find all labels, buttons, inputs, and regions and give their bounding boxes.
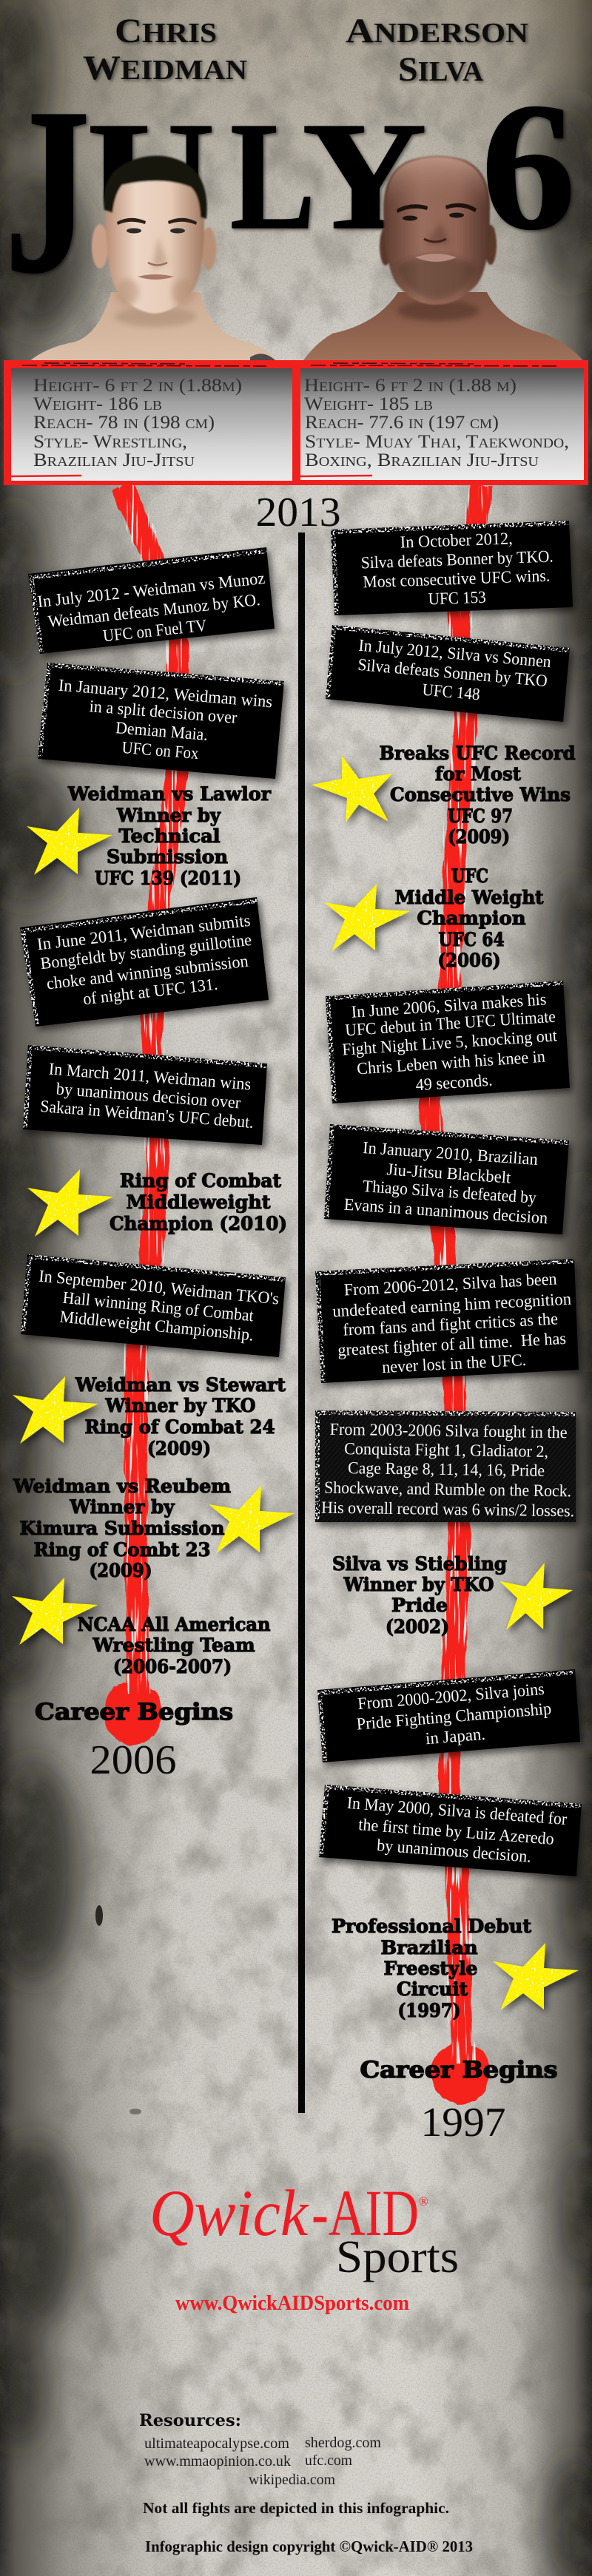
- milestone: Weidman vs Reubem: Winner by: [70, 1496, 175, 1518]
- resources: wikipedia.com: [249, 2472, 335, 2488]
- stats text: Style- Muay Thai, Taekwondo,: [305, 432, 569, 452]
- milestone: Weidman vs Lawlor: UFC 139 (2011): [95, 868, 241, 889]
- milestone: Professional Debut: Brazilian: [380, 1937, 478, 1958]
- card: September 2010 Hall: Middleweight Championship.: [59, 1307, 255, 1345]
- card: June 2006 Leben: UFC debut in The UFC Ultimate: [344, 1007, 556, 1039]
- card: July 2012 Sonnen: [326, 625, 570, 722]
- resources: sherdog.com: [305, 2435, 381, 2451]
- card: March 2011 Sakara: by unanimous decision over: [56, 1079, 241, 1112]
- card: January 2010 Thiago Silva: In January 2010, Brazilian: [362, 1138, 539, 1169]
- milestone: Weidman vs Lawlor: Technical: [118, 825, 221, 847]
- date headline: July 6: U: [87, 91, 215, 262]
- start: Silva career begins: [360, 2057, 558, 2146]
- stats text: Boxing, Brazilian Jiu-Jitsu: [305, 450, 539, 470]
- portrait: Anderson Silva: [302, 155, 585, 362]
- stats text: [304, 376, 569, 470]
- card: July 2012 Munoz: Weidman defeats Munoz by KO.: [47, 590, 261, 631]
- milestone: Weidman vs Reubem: [13, 1475, 295, 1581]
- name: Weidman: WEIDMAN: [83, 49, 247, 87]
- milestone: Professional Debut: Freestyle: [383, 1958, 478, 1979]
- milestone: UFC Middle Weight Champion: [324, 865, 544, 971]
- milestone: Silva vs Stiebling: Pride: [391, 1595, 448, 1616]
- card: June 2011 Bongfeldt: In June 2011, Weidman submits: [36, 911, 252, 953]
- resources: ufc.com: [305, 2452, 352, 2469]
- milestone: Silva vs Stiebling: [332, 1553, 573, 1637]
- stats text: Height- 6 ft 2 in (1.88m): [33, 376, 242, 396]
- logo: Qwick-AID Sports: [149, 2177, 459, 2282]
- milestone: Silva vs Stiebling: (2002): [386, 1616, 449, 1637]
- card: July 2012 Munoz: [28, 547, 275, 654]
- milestone: NCAA All American: [12, 1578, 271, 1677]
- year: 2013: 2013: [256, 490, 340, 535]
- left career dot: [104, 1681, 162, 1745]
- card: October 2012 Bonner: In October 2012,: [400, 529, 513, 552]
- stats text: Height- 6 ft 2 in (1.88 m): [304, 376, 517, 396]
- card: January 2010 Thiago Silva: Jiu-Jitsu Blackbelt: [386, 1160, 512, 1187]
- star: [13, 1376, 98, 1444]
- stats text: Reach- 77.6 in (197 cm): [305, 413, 499, 433]
- milestone: NCAA All American: (2006-2007): [113, 1656, 232, 1677]
- stats text: [33, 376, 242, 470]
- card: June 2006 Leben: [326, 981, 570, 1103]
- milestone: UFC Middle Weight Champion: Champion: [417, 907, 525, 929]
- card: June 2011 Bongfeldt: choke and winning submission: [46, 952, 249, 993]
- card: July 2012 Sonnen: Silva defeats Sonnen by TKO: [357, 655, 548, 690]
- card: January 2012 Maia: In January 2012, Weidman wins: [58, 676, 273, 711]
- milestone: Breaks UFC record: (2009): [448, 826, 510, 848]
- milestone: UFC Middle Weight Champion: Middle Weight: [395, 887, 544, 908]
- star: [500, 1563, 573, 1630]
- copyright: Infographic design copyright ©Qwick-AID® 2013: [145, 2538, 473, 2555]
- date headline: July 6: L: [230, 91, 315, 262]
- milestone: UFC Middle Weight Champion: (2006): [438, 950, 500, 971]
- stats text: Style- Wrestling,: [33, 432, 187, 452]
- milestone: Ring of Combat champion: Middleweight: [126, 1191, 271, 1213]
- card: May 2000 Azeredo: by unanimous decision.: [376, 1836, 532, 1866]
- card: 2000-2002 Pride: From 2000-2002, Silva joins: [357, 1680, 545, 1713]
- resources: Resources:: [139, 2411, 241, 2430]
- date headline: July 6: 6: [481, 66, 576, 268]
- milestone: Weidman vs Stewart: Ring of Combat 24: [84, 1416, 275, 1438]
- milestone: Weidman vs Reubem: Weidman vs Reubem: [13, 1475, 231, 1497]
- milestone: Weidman vs Lawlor: Submission: [107, 846, 228, 868]
- card: September 2010 Hall: In September 2010, Weidman TKO's: [38, 1266, 280, 1308]
- milestone: NCAA All American: Wrestling Team: [92, 1634, 255, 1656]
- milestone: Breaks UFC record: Breaks UFC Record: [379, 743, 576, 764]
- card: June 2011 Bongfeldt: Bongfeldt by standing guillotine: [39, 930, 252, 973]
- milestone: Silva vs Stiebling: Silva vs Stiebling: [332, 1553, 507, 1575]
- right red stroke: [429, 485, 481, 2063]
- right career dot: [431, 2042, 490, 2104]
- milestone: Ring of Combat champion: Champion (2010): [110, 1213, 287, 1234]
- milestone: Ring of Combat champion: Ring of Combat: [120, 1170, 281, 1191]
- card: June 2011 Bongfeldt: [20, 897, 269, 1027]
- milestone: Weidman vs Reubem: Ring of Combt 23: [34, 1539, 210, 1561]
- card: January 2012 Maia: Demian Maia.: [115, 718, 209, 744]
- card: September 2010 Hall: Hall winning Ring of Combat: [62, 1288, 255, 1325]
- star: [493, 1943, 579, 2010]
- name: Chris: CHRIS: [115, 12, 217, 50]
- card: 2003-2006 record: Conquista Fight 1, Gladiator 2,: [344, 1439, 548, 1461]
- card: September 2010 Hall: [21, 1254, 286, 1357]
- card: 2006-2012 undefeated: never lost in the UFC.: [382, 1350, 527, 1376]
- card: July 2012 Sonnen: UFC 148: [422, 680, 481, 703]
- stats text: Reach- 78 in (198 cm): [33, 413, 215, 433]
- logo: Qwick-AID Sports: Qwick: [149, 2177, 309, 2250]
- milestone: Weidman vs Stewart: (2009): [147, 1438, 211, 1459]
- milestone: NCAA All American: NCAA All American: [77, 1614, 271, 1635]
- card: 2000-2002 Pride: Pride Fighting Championship: [356, 1699, 552, 1734]
- milestone: Breaks UFC record: [312, 743, 576, 848]
- milestone: Weidman vs Stewart: Winner by TKO: [105, 1395, 256, 1416]
- centre timeline bar: [298, 533, 305, 2113]
- resources: www.mmaopinion.co.uk: [144, 2453, 291, 2469]
- card: 2003-2006 record: From 2003-2006 Silva fought in the: [329, 1420, 568, 1441]
- milestone: Ring of Combat champion: [27, 1169, 287, 1237]
- card: July 2012 Munoz: In July 2012 - Weidman vs Munoz: [36, 569, 266, 611]
- milestone: Professional Debut: Professional Debut: [332, 1916, 531, 1937]
- card: 2003-2006 record: Shockwave, and Rumble on the Rock.: [324, 1478, 571, 1500]
- card: January 2012 Maia: in a split decision over: [89, 697, 238, 727]
- milestone: Weidman vs Lawlor: [27, 783, 272, 889]
- card: May 2000 Azeredo: the first time by Luiz Azeredo: [357, 1815, 555, 1848]
- card: January 2012 Maia: UFC on Fox: [121, 738, 200, 763]
- card: 2000-2002 Pride: [317, 1669, 580, 1762]
- milestone: Weidman vs Reubem: Kimura Submission: [19, 1518, 225, 1539]
- card: 2006-2012 undefeated: undefeated earning him recognition: [332, 1290, 572, 1320]
- date headline: July 6: [4, 58, 576, 322]
- logo: Qwick-AID Sports: Sports: [336, 2232, 459, 2282]
- milestone: Professional Debut: Circuit: [397, 1978, 468, 2000]
- website url: www.QwickAIDSports.com: [175, 2291, 409, 2315]
- year 1997: 1997: [420, 2100, 506, 2146]
- date headline: July 6: Y: [302, 91, 427, 262]
- card: October 2012 Bonner: [331, 521, 573, 615]
- card: October 2012 Bonner: UFC 153: [428, 588, 486, 608]
- resources: [139, 2411, 381, 2488]
- card: July 2012 Sonnen: In July 2012, Silva vs Sonnen: [358, 636, 552, 671]
- card: May 2000 Azeredo: [319, 1785, 582, 1876]
- date headline: July 6: J: [4, 58, 90, 322]
- logo: Qwick-AID Sports: -AID: [312, 2177, 419, 2250]
- card: May 2000 Azeredo: In May 2000, Silva is defeated for: [346, 1794, 568, 1828]
- milestone: Weidman vs Stewart: [13, 1374, 286, 1459]
- card: 2006-2012 undefeated: from fans and fight critics as the: [343, 1309, 559, 1339]
- card: March 2011 Sakara: [23, 1045, 267, 1145]
- milestone: Professional Debut: (1997): [398, 2000, 460, 2021]
- card: October 2012 Bonner: Silva defeats Bonner by TKO.: [360, 547, 554, 572]
- logo: Qwick-AID Sports: ®: [419, 2194, 428, 2208]
- name: Anderson: ANDERSON: [346, 12, 528, 50]
- milestone: Professional Debut: [332, 1916, 579, 2021]
- milestone: Weidman vs Stewart: Weidman vs Stewart: [75, 1374, 286, 1396]
- card: July 2012 Munoz: UFC on Fuel TV: [102, 616, 208, 645]
- start: Weidman career begins: [35, 1699, 233, 1783]
- card: June 2006 Leben: 49 seconds.: [415, 1071, 493, 1094]
- card: 2006-2012 undefeated: From 2006-2012, Silva has been: [343, 1269, 558, 1299]
- milestone: UFC Middle Weight Champion: UFC: [451, 865, 488, 887]
- milestone: Breaks UFC record: Consecutive Wins: [390, 784, 571, 805]
- card: January 2012 Maia: [38, 663, 284, 779]
- resources: ultimateapocalypse.com: [144, 2435, 289, 2452]
- stat box: Silva: [292, 360, 588, 485]
- card: June 2006 Leben: Chris Leben with his knee in: [356, 1047, 546, 1078]
- red timeline strokes: [104, 485, 490, 2104]
- star: [27, 808, 112, 875]
- star: [27, 1169, 113, 1237]
- start: Weidman career begins: Career Begins: [35, 1699, 233, 1725]
- fighter names: [83, 12, 528, 89]
- stat box: Weidman: [4, 360, 292, 485]
- stats text: Brazilian Jiu-Jitsu: [33, 450, 195, 470]
- star: [312, 756, 392, 822]
- start: Silva career begins: Career Begins: [360, 2057, 558, 2083]
- milestone: UFC Middle Weight Champion: UFC 64: [438, 929, 505, 950]
- milestone: Weidman vs Reubem: (2009): [89, 1560, 152, 1581]
- card: June 2011 Bongfeldt: of night at UFC 131.: [82, 975, 218, 1008]
- card: June 2006 Leben: Fight Night Live 5, knocking out: [341, 1026, 558, 1059]
- milestone: Breaks UFC record: UFC 97: [448, 805, 513, 827]
- card: January 2010 Thiago Silva: Evans in a unanimous decision: [343, 1195, 549, 1227]
- card: January 2010 Thiago Silva: Thiago Silva is defeated by: [362, 1177, 537, 1207]
- milestone: Weidman vs Lawlor: Winner by: [116, 805, 221, 826]
- milestone: Silva vs Stiebling: Winner by TKO: [343, 1574, 494, 1595]
- card: January 2010 Thiago Silva: [324, 1124, 569, 1234]
- card: 2003-2006 record: [315, 1410, 576, 1522]
- card: 2006-2012 undefeated: greatest fighter of all time. He has: [337, 1329, 567, 1359]
- star: [12, 1578, 98, 1645]
- star: [324, 884, 410, 951]
- card: June 2006 Leben: In June 2006, Silva makes his: [351, 990, 547, 1021]
- portrait: Chris Weidman: [28, 155, 280, 362]
- stats text: Weight- 185 lb: [304, 394, 433, 414]
- card: March 2011 Sakara: Sakara in Weidman's UFC debut.: [40, 1097, 255, 1132]
- card: March 2011 Sakara: In March 2011, Weidman wins: [48, 1060, 252, 1093]
- card: 2000-2002 Pride: in Japan.: [425, 1725, 486, 1748]
- card: 2006-2012 undefeated: [315, 1259, 579, 1383]
- stats text: Weight- 186 lb: [33, 394, 162, 414]
- card: 2003-2006 record: Cage Rage 8, 11, 14, 16, Pride: [348, 1458, 545, 1480]
- name: Silva: SILVA: [398, 50, 484, 89]
- disclaimer: Not all fights are depicted in this infographic.: [143, 2499, 449, 2517]
- milestone: Breaks UFC record: for Most: [435, 763, 521, 785]
- card: October 2012 Bonner: Most consecutive UFC wins.: [363, 567, 551, 591]
- year 2006: 2006: [90, 1737, 176, 1783]
- left red stroke: [122, 485, 178, 1694]
- star: [209, 1486, 295, 1553]
- card: 2003-2006 record: His overall record was 6 wins/2 losses.: [321, 1498, 574, 1520]
- milestone: Weidman vs Lawlor: Weidman vs Lawlor: [67, 783, 272, 805]
